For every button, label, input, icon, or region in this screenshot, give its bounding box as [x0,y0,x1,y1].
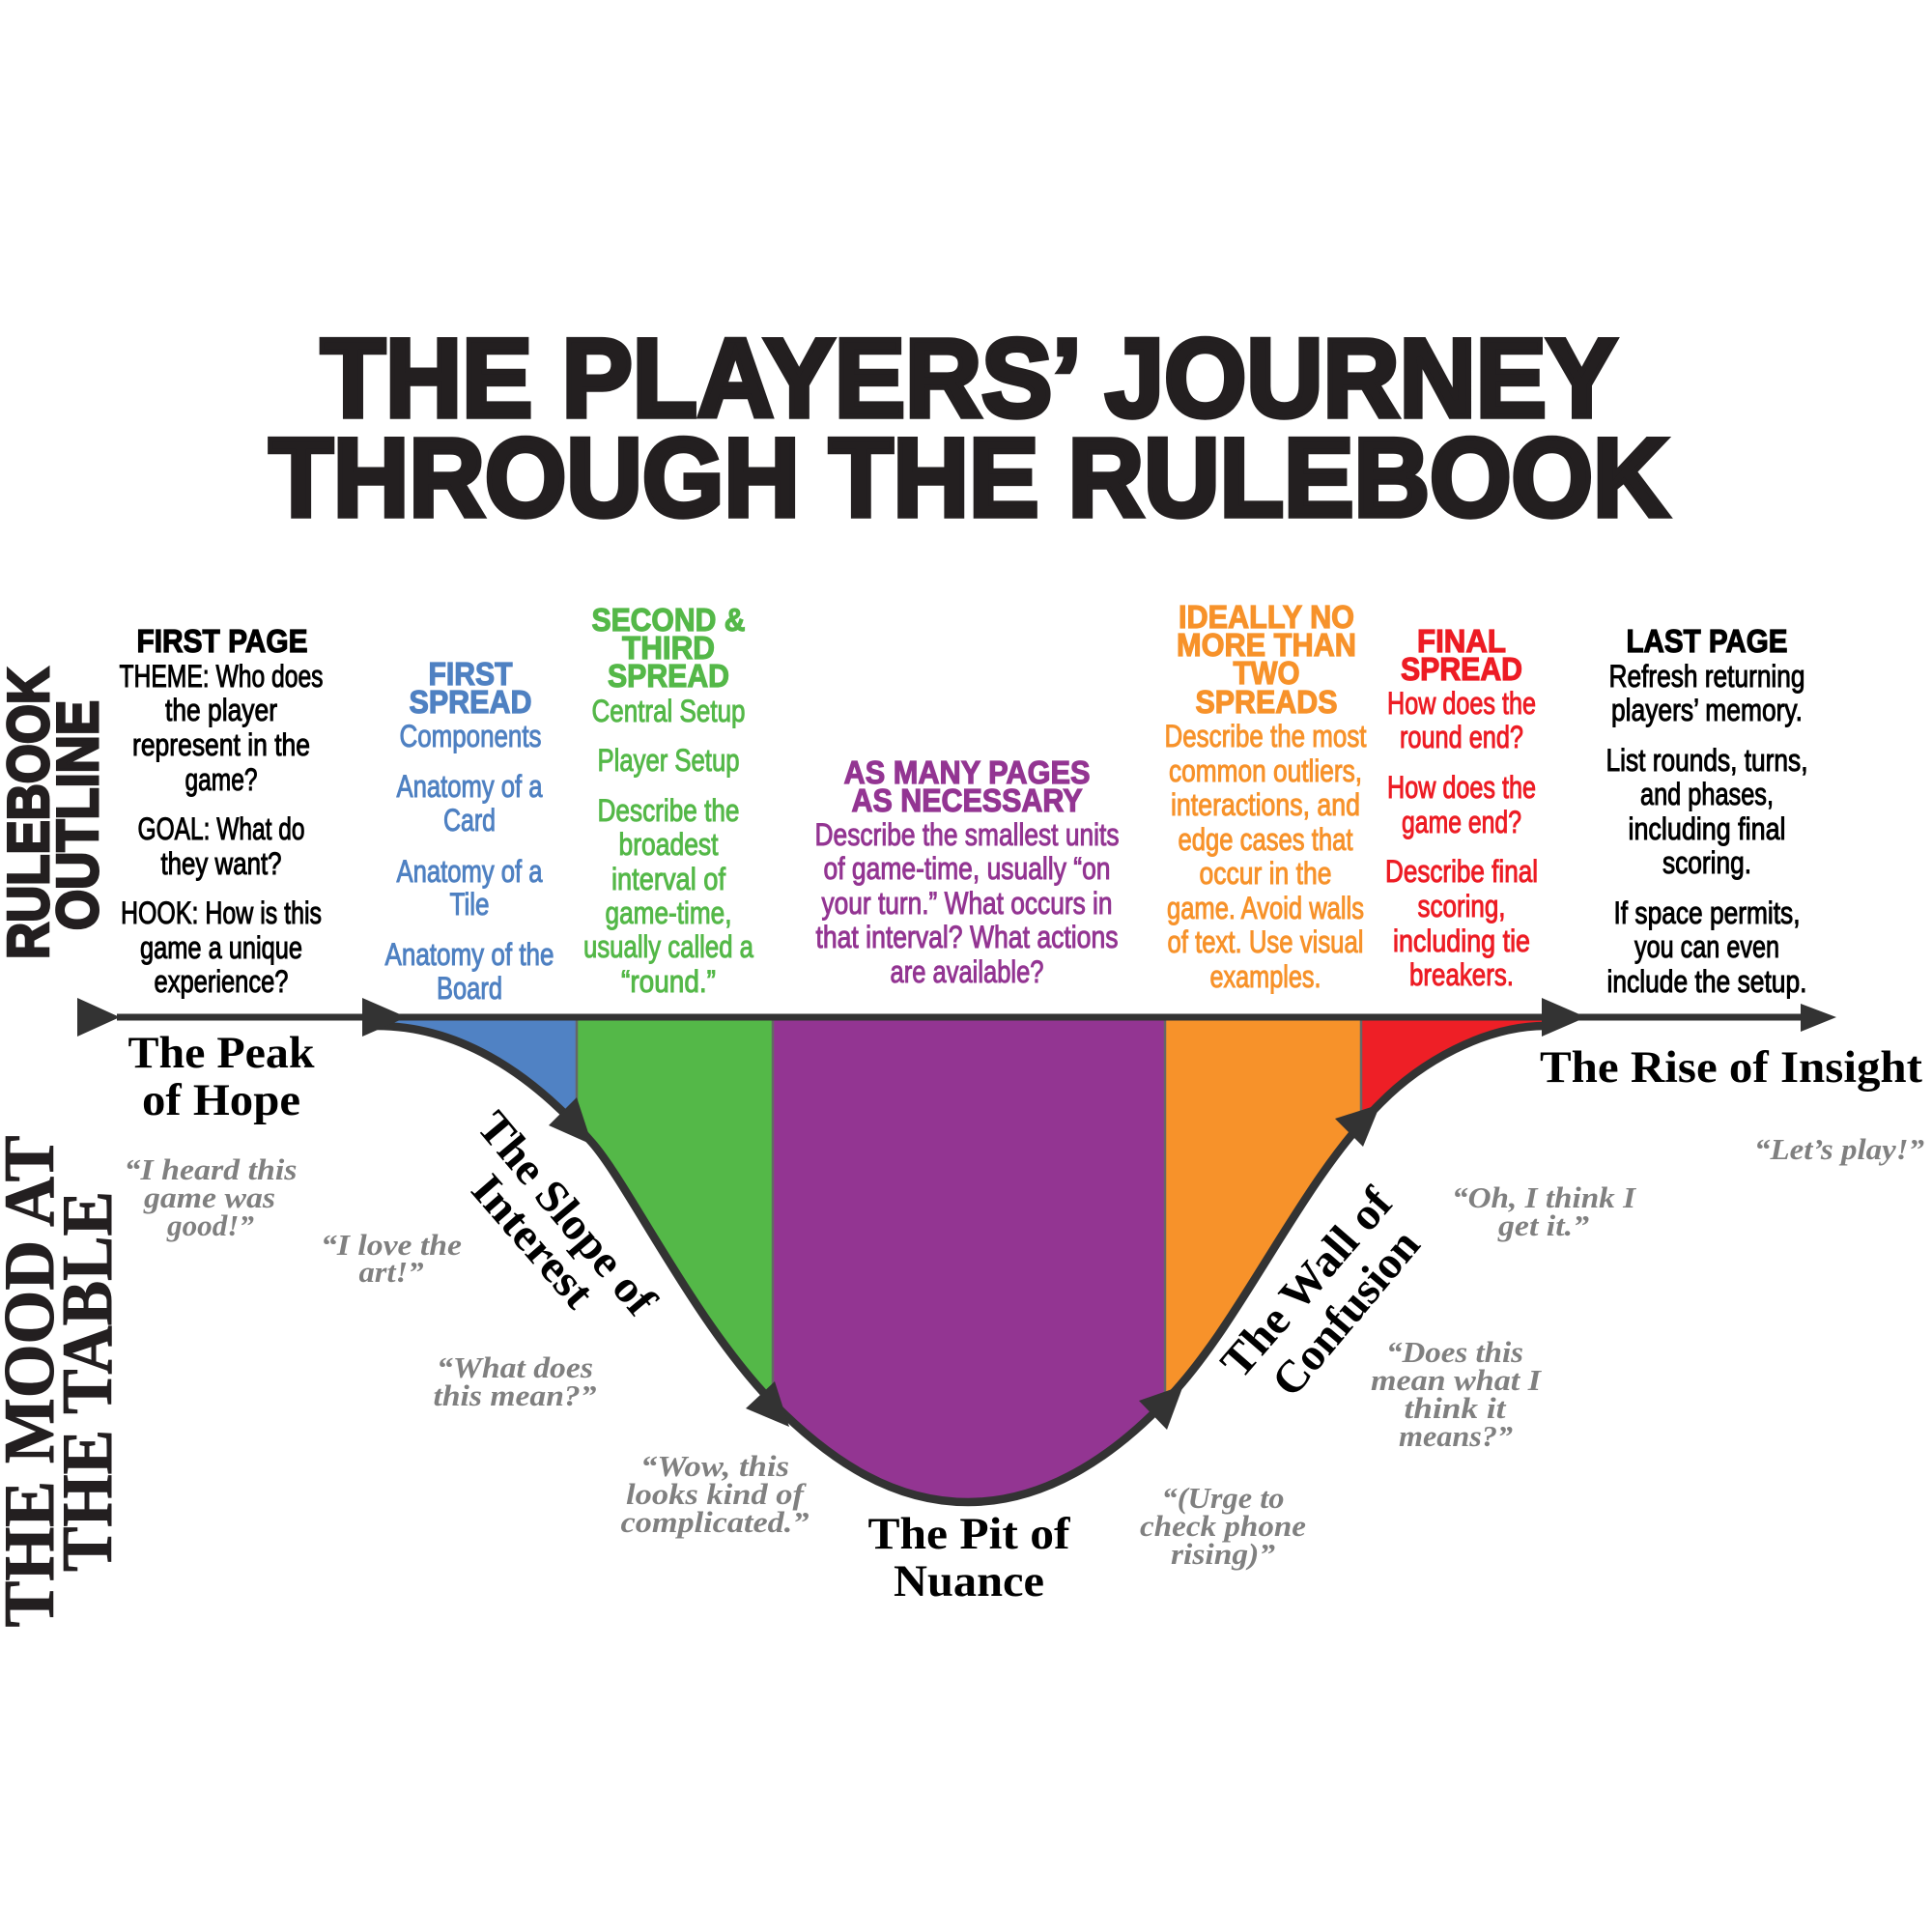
column: first spread: SPREAD [410,684,531,720]
quote: wow this looks kind of complicated: looks kind of [626,1477,807,1511]
column: final spread: Describe final [1385,854,1538,889]
column: as many pages as necessary: are available? [891,954,1043,989]
column: ideally no more than two spreads: interactions, and [1171,787,1360,822]
column: as many pages as necessary: that interval? What actions [815,920,1119,954]
column: final spread: round end? [1400,720,1523,754]
side heading: the mood at the table [0,1136,128,1627]
column: last page: players’ memory. [1611,693,1803,727]
quote: urge to check phone rising [1140,1481,1306,1571]
column: last page: include the setup. [1607,964,1806,999]
label: the wall of confusion: Confusion [1263,1220,1430,1406]
column: as many pages as necessary [815,754,1119,989]
column: ideally no more than two spreads: Describe the most [1165,719,1367,753]
quote: does this mean what i think it means: means?” [1399,1419,1513,1453]
column: ideally no more than two spreads: common outliers, [1169,753,1362,788]
column: first page: the player [165,693,277,727]
column: second and third spread: THIRD [622,630,715,666]
column: final spread: scoring, [1418,889,1505,923]
column: last page: List rounds, turns, [1605,743,1808,778]
column: ideally no more than two spreads: MORE THAN [1177,627,1356,663]
quote: urge to check phone rising: “(Urge to [1161,1481,1285,1515]
quote: i love the art: art!” [359,1255,423,1289]
column: first page: game? [185,762,257,797]
quote: what does this mean [433,1350,597,1412]
column: first spread: Anatomy of a [396,769,543,804]
column: second and third spread: usually called a [583,929,753,964]
label: the slope of interest: The Slope of [468,1102,667,1326]
column: final spread: SPREAD [1401,651,1522,687]
column: first page: game a unique [140,930,302,965]
quote: i heard this game was good: good!” [166,1208,254,1242]
column: first page: THEME: Who does [120,659,323,694]
label: the pit of nuance: Nuance [894,1556,1044,1606]
column: last page: If space permits, [1613,895,1801,930]
column: first spread: Tile [450,887,489,922]
quote: urge to check phone rising: check phone [1140,1509,1306,1543]
side heading: the mood at the table: THE TABLE [48,1191,128,1572]
column: ideally no more than two spreads: SPREADS [1196,684,1337,720]
chart: coloured pit segments under the axis [377,1017,1549,1510]
quote: what does this mean: “What does [437,1350,593,1384]
quote: does this mean what i think it means: “Does this [1386,1335,1523,1369]
quote: does this mean what i think it means [1371,1335,1542,1453]
label: the wall of confusion: The Wall of [1211,1178,1404,1388]
column: as many pages as necessary: your turn.” What occurs in [821,886,1113,921]
label: the rise of insight: The Rise of Insight [1540,1042,1922,1093]
label: the peak of hope: of Hope [142,1075,300,1125]
column: first spread: Anatomy of a [396,854,543,889]
quote: i love the art: “I love the [321,1228,462,1262]
column: first spread: Card [443,803,496,838]
column: last page: you can even [1634,929,1779,964]
side heading: rulebook outline [0,668,110,959]
column: second and third spread: Player Setup [597,743,740,778]
column: second and third spread: interval of [611,862,725,896]
quote: oh i think i get it [1452,1180,1636,1242]
column: second and third spread [583,602,753,999]
label: the slope of interest: Interest [462,1165,604,1319]
column: ideally no more than two spreads: examples. [1209,959,1321,994]
column: second and third spread: game-time, [605,895,732,930]
column: first page: experience? [155,964,288,999]
column: ideally no more than two spreads: edge cases that [1179,822,1353,857]
label: the peak of hope: The Peak [128,1028,315,1078]
title: THE PLAYERS’ JOURNEY [321,317,1617,440]
quote: oh i think i get it: “Oh, I think I [1452,1180,1636,1214]
quote: does this mean what i think it means: think it [1405,1391,1507,1425]
quote: oh i think i get it: get it.” [1497,1208,1589,1242]
column: as many pages as necessary: AS MANY PAGES [844,754,1090,790]
title [269,317,1669,540]
column: second and third spread: Central Setup [591,694,746,728]
column: final spread: game end? [1402,805,1521,839]
column: final spread: including tie [1393,923,1530,958]
column: ideally no more than two spreads: TWO [1233,655,1300,691]
column: first spread: Components [400,719,541,753]
side heading: rulebook outline: OUTLINE [45,700,110,930]
column: as many pages as necessary: Describe the smallest units [815,817,1119,852]
column: first page: represent in the [132,727,310,762]
column: ideally no more than two spreads [1165,599,1367,994]
column: first page: GOAL: What do [137,811,305,846]
column: final spread: How does the [1387,686,1536,721]
column: first spread: Board [437,971,502,1006]
column: first spread: FIRST [429,656,512,692]
quote: i love the art [321,1228,462,1289]
column: last page: including final [1629,811,1785,846]
column: final spread: How does the [1387,770,1536,805]
column: ideally no more than two spreads: of text. Use visual [1167,924,1364,959]
quote: does this mean what i think it means: mean what I [1371,1363,1542,1397]
mood curve [377,1026,1546,1502]
axis line [117,1014,1806,1020]
quote: wow this looks kind of complicated: “Wow, this [640,1449,789,1483]
column: final spread: breakers. [1409,957,1514,992]
quote: wow this looks kind of complicated [620,1449,810,1539]
arrows on axis and curve [77,998,1836,1430]
column: last page: scoring. [1662,845,1751,880]
quote: i heard this game was good [124,1152,298,1242]
column: second and third spread: broadest [618,827,719,862]
column: as many pages as necessary: of game-time, usually “on [823,851,1111,886]
column: first spread: Anatomy of the [384,937,554,972]
quote: let's play: “Let’s play!” [1754,1132,1924,1166]
column: last page: Refresh returning [1609,659,1804,694]
column: final spread: FINAL [1417,623,1506,659]
quote: wow this looks kind of complicated: complicated.” [620,1505,810,1539]
column: last page: and phases, [1640,777,1774,811]
column: first page: HOOK: How is this [121,895,322,930]
column: ideally no more than two spreads: occur in the [1200,856,1331,891]
column: as many pages as necessary: AS NECESSARY [852,782,1082,818]
label: the peak of hope [128,1028,315,1125]
quote: what does this mean: this mean?” [433,1378,597,1412]
column: first spread [384,656,554,1006]
title: THROUGH THE RULEBOOK [269,416,1669,540]
quote: i heard this game was good: “I heard this [124,1152,298,1186]
column: ideally no more than two spreads: IDEALLY NO [1179,599,1354,635]
label: the pit of nuance: The Pit of [867,1509,1071,1559]
column: last page: LAST PAGE [1627,623,1787,659]
quote: i heard this game was good: game was [143,1180,275,1214]
column: second and third spread: SPREAD [608,658,729,694]
column: second and third spread: “round.” [621,964,716,999]
column: first page: FIRST PAGE [137,623,307,659]
quote: urge to check phone rising: rising)” [1171,1537,1275,1571]
column: first page: they want? [160,846,282,881]
column: ideally no more than two spreads: game. Avoid walls [1167,891,1364,925]
column: second and third spread: SECOND & [591,602,746,638]
column: first page [120,623,323,999]
column: final spread [1385,623,1538,992]
column: last page [1605,623,1808,999]
column: second and third spread: Describe the [597,793,740,828]
label: the pit of nuance [867,1509,1071,1606]
